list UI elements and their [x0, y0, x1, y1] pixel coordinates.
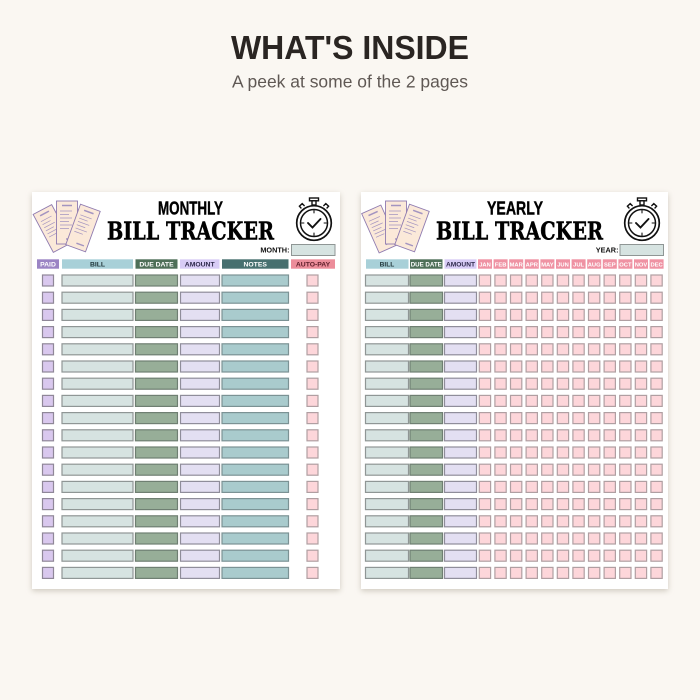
month field [260, 244, 335, 256]
heading: yearly: YEARLY [487, 198, 543, 218]
table header row: NOV [635, 262, 647, 268]
heading: monthly: MONTHLY [158, 198, 223, 218]
table rows [366, 275, 662, 578]
heading: bill tracker: BILL TRACKER [436, 216, 604, 245]
table header row: BILL [90, 262, 105, 268]
icon: stopwatch [297, 198, 331, 240]
table header row: SEP [604, 262, 616, 268]
year field [596, 244, 664, 256]
year field: YEAR: [596, 246, 618, 254]
table header row [366, 259, 664, 269]
table header row: NOTES [243, 262, 267, 268]
table header row: AUTO-PAY [296, 262, 331, 268]
heading: bill tracker: BILL TRACKER [107, 216, 275, 245]
table header row: PAID [40, 262, 56, 268]
table header row: JAN [479, 262, 491, 268]
icon: stopwatch [625, 198, 659, 240]
icon: receipts [362, 201, 429, 253]
table header row: AMOUNT [446, 262, 475, 268]
subtitle: A peek at some of the 2 pages [232, 72, 468, 92]
title: WHAT'S INSIDE [231, 29, 469, 66]
table header row: JUN [557, 262, 569, 268]
table header row: OCT [619, 262, 632, 268]
table header row: DUE DATE [139, 262, 174, 268]
panel: monthly bill tracker page [32, 192, 340, 591]
table header row: DUE DATE [411, 262, 442, 268]
table header row: DEC [650, 262, 664, 268]
table header row: AUG [588, 262, 601, 268]
table header row: MAR [510, 262, 524, 268]
table header row: BILL [380, 262, 394, 268]
icon: receipts [33, 201, 100, 252]
table header row: JUL [573, 262, 585, 268]
table rows [42, 275, 318, 578]
table header row: MAY [541, 262, 554, 268]
table header row: AMOUNT [185, 262, 215, 268]
table header row: FEB [495, 262, 506, 268]
month field: MONTH: [260, 246, 290, 254]
table header row: APR [526, 262, 539, 268]
table header row [37, 259, 335, 269]
panel: yearly bill tracker page [361, 192, 668, 591]
